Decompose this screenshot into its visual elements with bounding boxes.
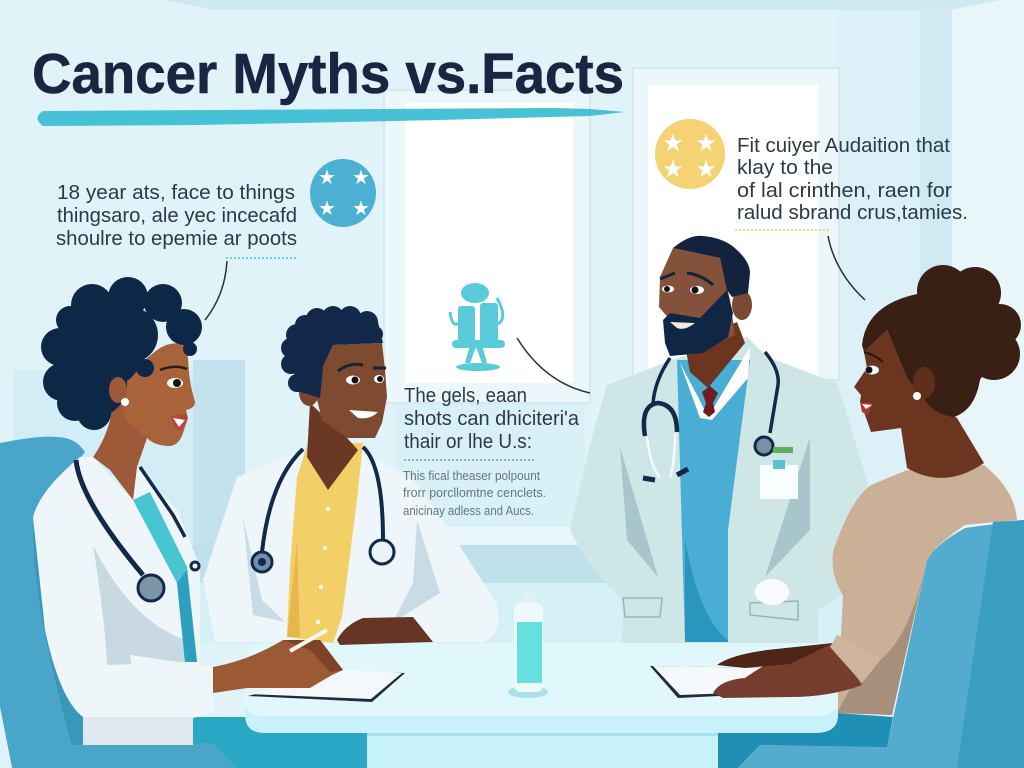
eyes and brows [338, 364, 386, 384]
left trousers [193, 717, 367, 768]
text block: right callout [737, 134, 968, 224]
text block: centre callout: The gels, eaan [404, 384, 527, 407]
title: Cancer Myths vs.Facts [32, 42, 624, 106]
callout leader: right [735, 230, 865, 300]
text block: left callout [56, 181, 297, 250]
callout leader: left [205, 258, 298, 320]
yellow shirt [287, 443, 363, 643]
coat shadows [620, 437, 810, 577]
chair: right [738, 520, 1024, 768]
badge [760, 447, 798, 499]
text block: left callout: 18 year ats, face to things [57, 181, 295, 204]
icon: yellow circle with stars: ★ [662, 129, 684, 157]
text block: centre small print: frorr porcllomtne cenclets. [403, 486, 546, 500]
icon: teal figure [450, 283, 505, 371]
text block: centre small print [403, 469, 546, 518]
hair [673, 236, 750, 297]
pockets [623, 598, 798, 620]
text block: right callout: ralud sbrand crus,tamies. [737, 201, 968, 224]
keyboard: left [248, 670, 405, 702]
bottle [508, 593, 548, 698]
pocket hand [755, 579, 789, 605]
coat [33, 457, 213, 745]
ear [732, 290, 752, 320]
callout leader: centre [517, 338, 590, 393]
neck [93, 375, 147, 500]
shirt buttons [316, 507, 330, 624]
coat [570, 337, 870, 643]
teal shirt [133, 492, 197, 662]
text block: centre callout: shots can dhiciteri'a [404, 407, 580, 430]
table [245, 643, 838, 768]
icon: yellow circle with stars: ★ [695, 155, 717, 183]
face [659, 248, 735, 355]
eyes and brows [660, 273, 713, 294]
eye [864, 352, 883, 374]
icon: blue circle with stars: ★ [318, 165, 336, 189]
tie [702, 386, 718, 417]
icon: blue circle with stars: ★ [318, 196, 336, 220]
sleeve: left doctor [130, 655, 213, 717]
keyboard: right [650, 666, 770, 698]
ear [299, 378, 319, 406]
text block: centre callout: thair or lhe U.s: [404, 430, 532, 453]
stethoscope [252, 447, 394, 572]
right trousers [718, 713, 893, 768]
neck [307, 403, 358, 490]
neck [685, 322, 745, 388]
text block: right callout: klay to the [737, 156, 833, 179]
text block: left callout: thingsaro, ale yec incecafd [57, 204, 297, 227]
neck and face [854, 330, 984, 478]
sleeve: woman [830, 635, 882, 683]
figure: woman right [832, 265, 1021, 715]
coat [203, 453, 498, 642]
text block: centre small print: This fical theaser polpount [403, 469, 540, 483]
lips [860, 402, 873, 415]
stethoscope [643, 352, 778, 480]
stethoscope [76, 460, 199, 601]
window: right [633, 68, 839, 380]
blue vest [677, 360, 750, 642]
smile [349, 410, 378, 418]
hand: woman [713, 643, 862, 698]
chair: left [0, 437, 237, 768]
face [120, 343, 195, 446]
text block: left callout: shoulre to epemie ar poots [56, 227, 297, 250]
icon: yellow circle with stars [655, 119, 725, 189]
pen [290, 630, 327, 651]
mouth [670, 322, 695, 329]
lips [171, 414, 187, 431]
eye and brow [160, 367, 187, 388]
figure: doctor centre right [570, 236, 870, 643]
title underline brush stroke [38, 108, 625, 126]
figure: doctor left [33, 277, 213, 745]
coat shadow [93, 545, 185, 665]
beard [663, 290, 733, 356]
window: centre [384, 90, 590, 403]
ear [913, 367, 935, 399]
text block: centre small print: anicinay adless and Aucs. [403, 504, 534, 518]
hair [41, 277, 202, 430]
hair [862, 265, 1021, 417]
figure: doctor with yellow shirt [203, 306, 498, 643]
shirt collar [680, 347, 750, 420]
hand: yellow shirt doctor [337, 617, 433, 645]
text block: centre callout [404, 384, 580, 453]
face [316, 343, 387, 438]
text block: right callout: of lal crinthen, raen for [737, 179, 952, 202]
coat shadows [243, 517, 440, 622]
hair [281, 306, 383, 398]
icon: yellow circle with stars: ★ [695, 129, 717, 157]
text block: right callout: Fit cuiyer Audaition that [737, 134, 950, 157]
earring [121, 398, 129, 406]
earring [913, 392, 921, 400]
beige top [832, 465, 1017, 715]
ear [109, 377, 127, 403]
icon: blue circle with stars: ★ [352, 165, 370, 189]
hand: left doctor [213, 640, 343, 693]
icon: yellow circle with stars: ★ [662, 155, 684, 183]
icon: blue circle with stars [310, 159, 376, 227]
icon: blue circle with stars: ★ [352, 196, 370, 220]
